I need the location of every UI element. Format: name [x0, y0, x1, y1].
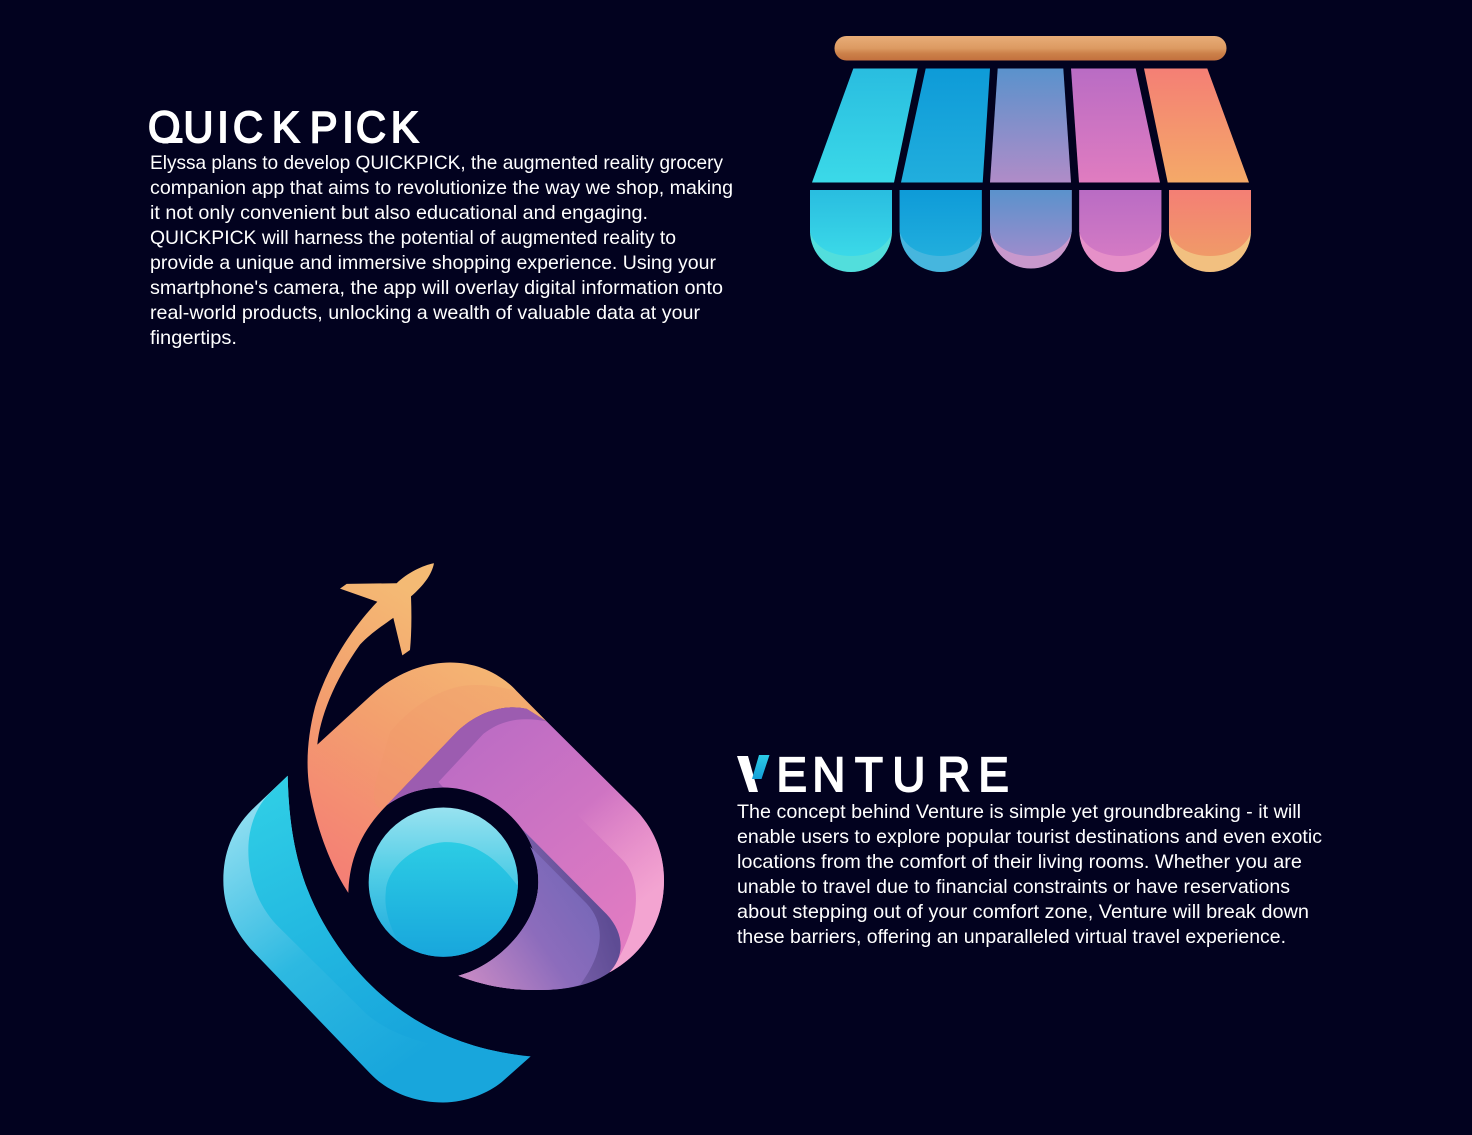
text block: Venture body — [737, 801, 1322, 948]
heading: QUICKPICK — [149, 110, 420, 144]
text block: Venture body: unable to travel due to financial constraints or have reservations — [737, 876, 1290, 898]
text block: QUICKPICK body: real-world products, unlocking a wealth of valuable data at your — [150, 302, 701, 324]
heading: VENTURE — [737, 755, 1008, 792]
text block: QUICKPICK body: provide a unique and immersive shopping experience. Using your — [150, 252, 717, 274]
awning rail — [834, 36, 1226, 60]
text block: Venture body: about stepping out of your comfort zone, Venture will break down — [737, 901, 1309, 923]
heading: VENTURE: VENTURE — [737, 747, 1009, 801]
text block: QUICKPICK body: it not only convenient but also educational and engaging. — [150, 202, 648, 224]
text block: QUICKPICK body: QUICKPICK will harness the potential of augmented reality to — [150, 227, 676, 249]
text block: QUICKPICK body: Elyssa plans to develop QUICKPICK, the augmented reality grocery — [150, 152, 723, 174]
blue lens circle — [369, 807, 520, 961]
awning scallops — [810, 190, 1251, 272]
panel: Venture description — [737, 747, 1322, 948]
text block: QUICKPICK body: fingertips. — [150, 327, 237, 349]
text block: Venture body: locations from the comfort of their living rooms. Whether you are — [737, 851, 1302, 873]
heading: QUICKPICK: QUICKPICK — [148, 103, 419, 152]
icon: travel camera logo with plane — [223, 563, 664, 1102]
pink camera body — [387, 707, 664, 990]
purple lens shadow — [458, 829, 621, 990]
panel: QUICKPICK description — [148, 103, 733, 349]
text block: QUICKPICK body: companion app that aims to revolutionize the way we shop, making — [150, 177, 733, 199]
text block: Venture body: these barriers, offering an unparalleled virtual travel experience. — [737, 926, 1286, 948]
blue swoosh — [223, 776, 531, 1102]
orange body and plane trail — [308, 563, 547, 893]
text block: Venture body: The concept behind Venture is simple yet groundbreaking - it will — [737, 801, 1301, 823]
awning panels — [812, 68, 1249, 182]
text block: QUICKPICK body — [150, 152, 733, 349]
text block: Venture body: enable users to explore popular tourist destinations and even exotic — [737, 826, 1322, 848]
text block: QUICKPICK body: smartphone's camera, the app will overlay digital information onto — [150, 277, 723, 299]
icon: shop awning — [810, 36, 1251, 272]
